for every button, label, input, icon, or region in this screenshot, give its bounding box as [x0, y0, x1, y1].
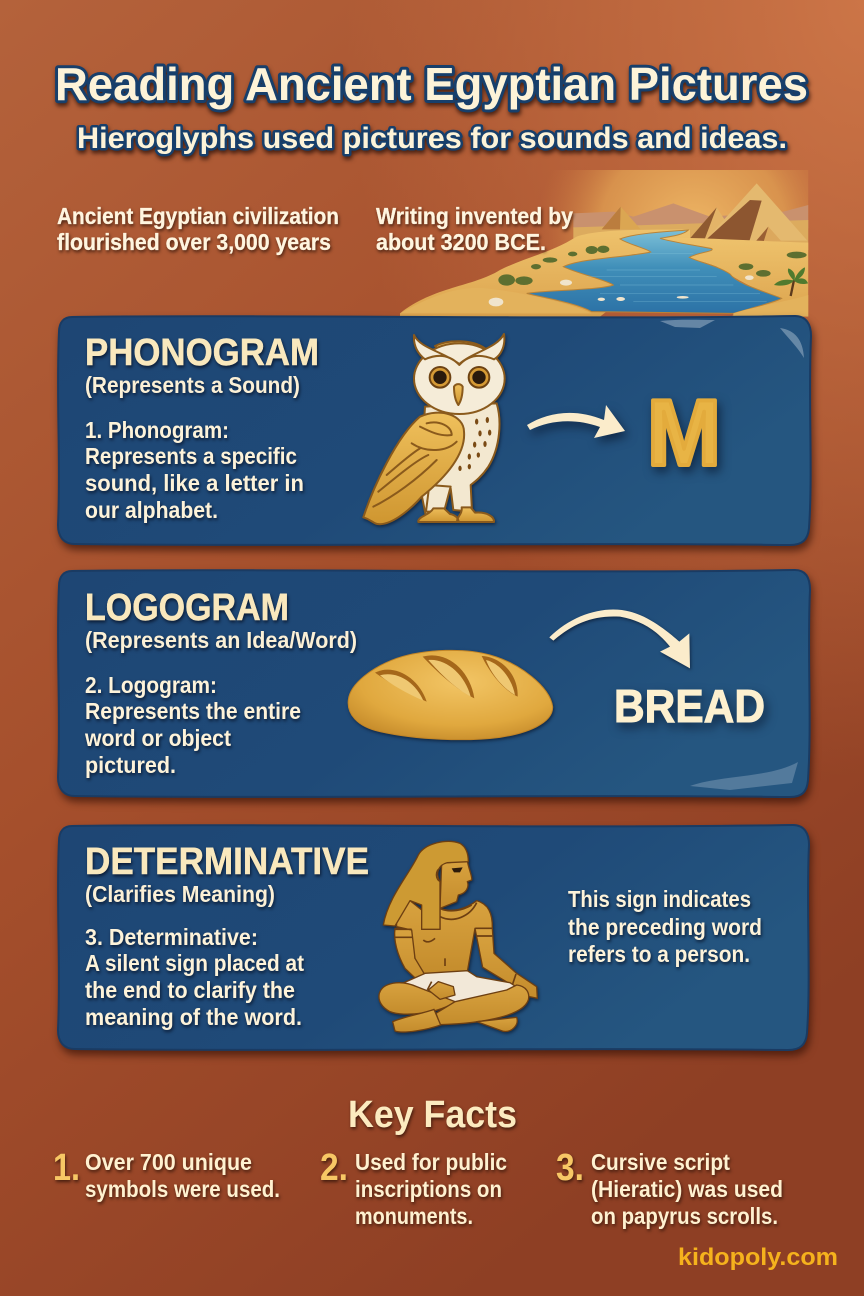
- fact 3: on papyrus scrolls.: [591, 1203, 778, 1229]
- description: phonogram: our alphabet.: [85, 497, 218, 523]
- description: phonogram: Represents a specific: [85, 443, 297, 469]
- fact 3: Cursive script: [591, 1149, 730, 1175]
- explanation: person sign: refers to a person.: [568, 941, 750, 967]
- description: determinative: 3. Determinative:: [85, 924, 258, 950]
- icon: owl hieroglyph: [363, 334, 505, 524]
- heading: logogram: [85, 587, 357, 653]
- description: logogram: [84, 672, 301, 778]
- heading: logogram: LOGOGRAM: [85, 587, 289, 629]
- panel plate: [58, 316, 811, 545]
- intro text: writing: [376, 203, 573, 255]
- fact 3: [556, 1147, 783, 1229]
- title: Reading Ancient Egyptian Pictures: [55, 58, 808, 110]
- heading: phonogram: (Represents a Sound): [85, 372, 300, 398]
- lower dunes: [400, 300, 591, 314]
- description: phonogram: [85, 417, 304, 523]
- illustration: Nile river and pyramids: [400, 170, 808, 317]
- large pyramids: [690, 184, 807, 241]
- heading: determinative: (Clarifies Meaning): [85, 881, 275, 907]
- description: determinative: meaning of the word.: [85, 1004, 302, 1030]
- sand banks: [400, 229, 690, 317]
- description: logogram: 2. Logogram:: [85, 672, 217, 698]
- heading: logogram: (Represents an Idea/Word): [85, 627, 357, 653]
- description: determinative: A silent sign placed at: [85, 950, 304, 976]
- arrow: owl to M: [527, 405, 625, 438]
- shrubs and stones: [498, 246, 807, 286]
- fact 3: 3.: [556, 1147, 584, 1189]
- fact 2: [320, 1147, 507, 1229]
- description: logogram: word or object: [84, 725, 231, 751]
- heading: phonogram: PHONOGRAM: [85, 332, 319, 374]
- explanation: person sign: This sign indicates: [568, 886, 751, 912]
- description: determinative: the end to clarify the: [85, 977, 295, 1003]
- heading: determinative: DETERMINATIVE: [85, 841, 369, 883]
- intro text: civilization: [57, 203, 339, 255]
- explanation: person sign: the preceding word: [568, 914, 762, 940]
- fact 2: inscriptions on: [355, 1176, 502, 1202]
- fact 2: Used for public: [355, 1149, 507, 1175]
- fact 1: Over 700 unique: [85, 1149, 252, 1175]
- fact 2: monuments.: [355, 1203, 473, 1229]
- explanation: person sign: [568, 886, 762, 967]
- subtitle: Hieroglyphs used pictures for sounds and ideas.: [77, 122, 787, 155]
- intro text: civilization: Ancient Egyptian civilization: [57, 203, 339, 229]
- key facts heading: Key Facts: [348, 1094, 517, 1136]
- description: logogram: Represents the entire: [85, 698, 301, 724]
- brand: kidopoly.com: kidopoly.com: [678, 1244, 838, 1271]
- description: logogram: pictured.: [85, 752, 176, 778]
- description: phonogram: sound, like a letter in: [85, 470, 304, 496]
- heading: determinative: [85, 841, 369, 907]
- word BREAD: BREAD: [614, 680, 765, 732]
- letter M: M: [647, 380, 721, 485]
- panel: determinative: [58, 825, 809, 1050]
- panel: logogram: [58, 570, 810, 797]
- fact 2: 2.: [320, 1147, 348, 1189]
- intro text: writing: Writing invented by: [376, 203, 573, 229]
- fact 3: (Hieratic) was used: [591, 1176, 783, 1202]
- small pyramid: [602, 207, 641, 229]
- intro text: writing: about 3200 BCE.: [376, 229, 546, 255]
- description: phonogram: 1. Phonogram:: [85, 417, 229, 443]
- arrow: loaf to word: [549, 609, 690, 668]
- palm tree: [774, 267, 808, 296]
- panel: phonogram: [58, 316, 811, 545]
- fact 1: [53, 1147, 280, 1202]
- intro text: civilization: flourished over 3,000 years: [57, 229, 331, 255]
- panel plate: [58, 825, 809, 1050]
- river: [527, 230, 782, 313]
- panel plate: [58, 570, 810, 797]
- fact 1: 1.: [53, 1147, 80, 1189]
- description: determinative: [85, 924, 304, 1030]
- fact 1: symbols were used.: [85, 1176, 280, 1202]
- icon: bread loaf: [348, 650, 553, 740]
- icon: seated person hieroglyph: [379, 841, 537, 1032]
- heading: phonogram: [85, 332, 319, 398]
